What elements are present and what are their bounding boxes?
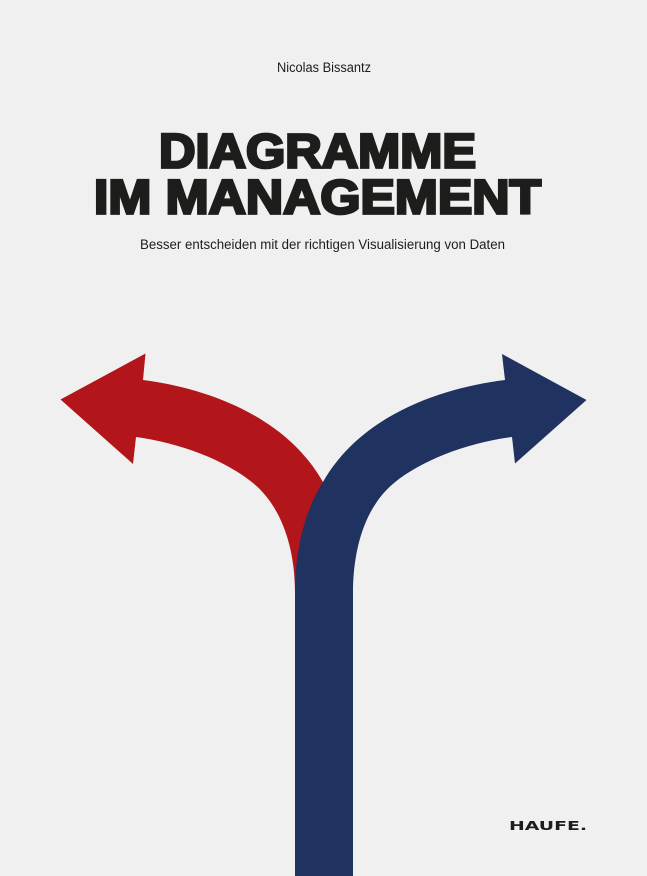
author name: Nicolas Bissantz [277, 60, 371, 75]
title: IM MANAGEMENT [94, 172, 541, 225]
title [94, 126, 541, 225]
arrow: blue right branch and stem [295, 354, 586, 876]
publisher logo: HAUFE. [509, 818, 587, 833]
arrow: red left branch [60, 354, 340, 600]
title: DIAGRAMME [159, 126, 476, 179]
subtitle: Besser entscheiden mit der richtigen Visualisierung von Daten [140, 237, 505, 252]
